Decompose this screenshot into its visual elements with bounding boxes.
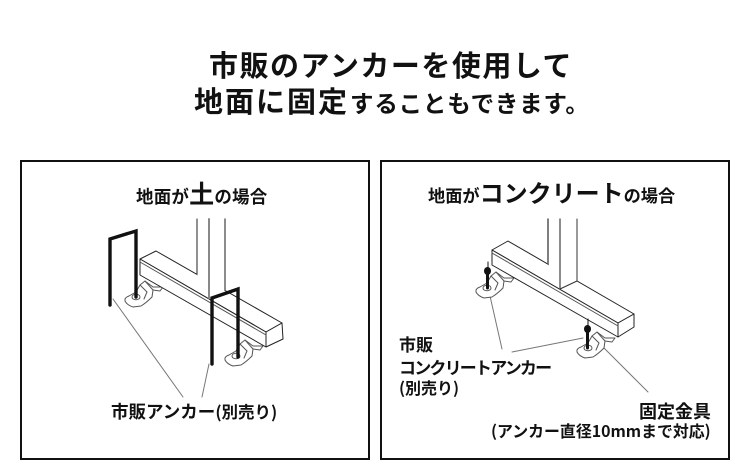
label line: 市販: 市販 [399,331,433,356]
label: fixing bracket: 固定金具 [639,398,711,424]
panel: soil [20,160,370,460]
bracket: soil front [225,340,263,366]
bracket: concrete front [577,332,615,358]
post: concrete [548,219,577,289]
label line: sold separately: (別売り) [399,375,459,399]
title line 2: 地面に固定することもできます。 [194,79,590,121]
title line 1: 市販のアンカーを使用して [209,43,573,85]
heading: concrete: 地面がコンクリートの場合 [428,174,675,209]
anchor bolt: front [584,319,591,348]
anchor staple: front [212,289,238,364]
heading: soil: 地面が土の場合 [136,175,267,211]
leader lines: concrete anchors and bracket [490,296,648,392]
beam: concrete [492,241,634,337]
label: soil anchor: 市販アンカー(別売り) [111,399,277,424]
bracket: soil rear [125,281,163,307]
label line: concrete anchor name: コンクリートアンカー [399,354,550,379]
label: anchor diameter note: (アンカー直径10mmまで対応) [491,419,711,442]
leader lines: soil anchors [113,299,209,397]
anchor bolt: rear [484,262,491,288]
post: soil [197,219,225,298]
anchor staple: rear [110,231,136,305]
label: concrete anchor [399,331,551,399]
bracket: concrete rear [476,272,514,298]
beam: soil [140,251,283,347]
panel: concrete [380,160,730,460]
